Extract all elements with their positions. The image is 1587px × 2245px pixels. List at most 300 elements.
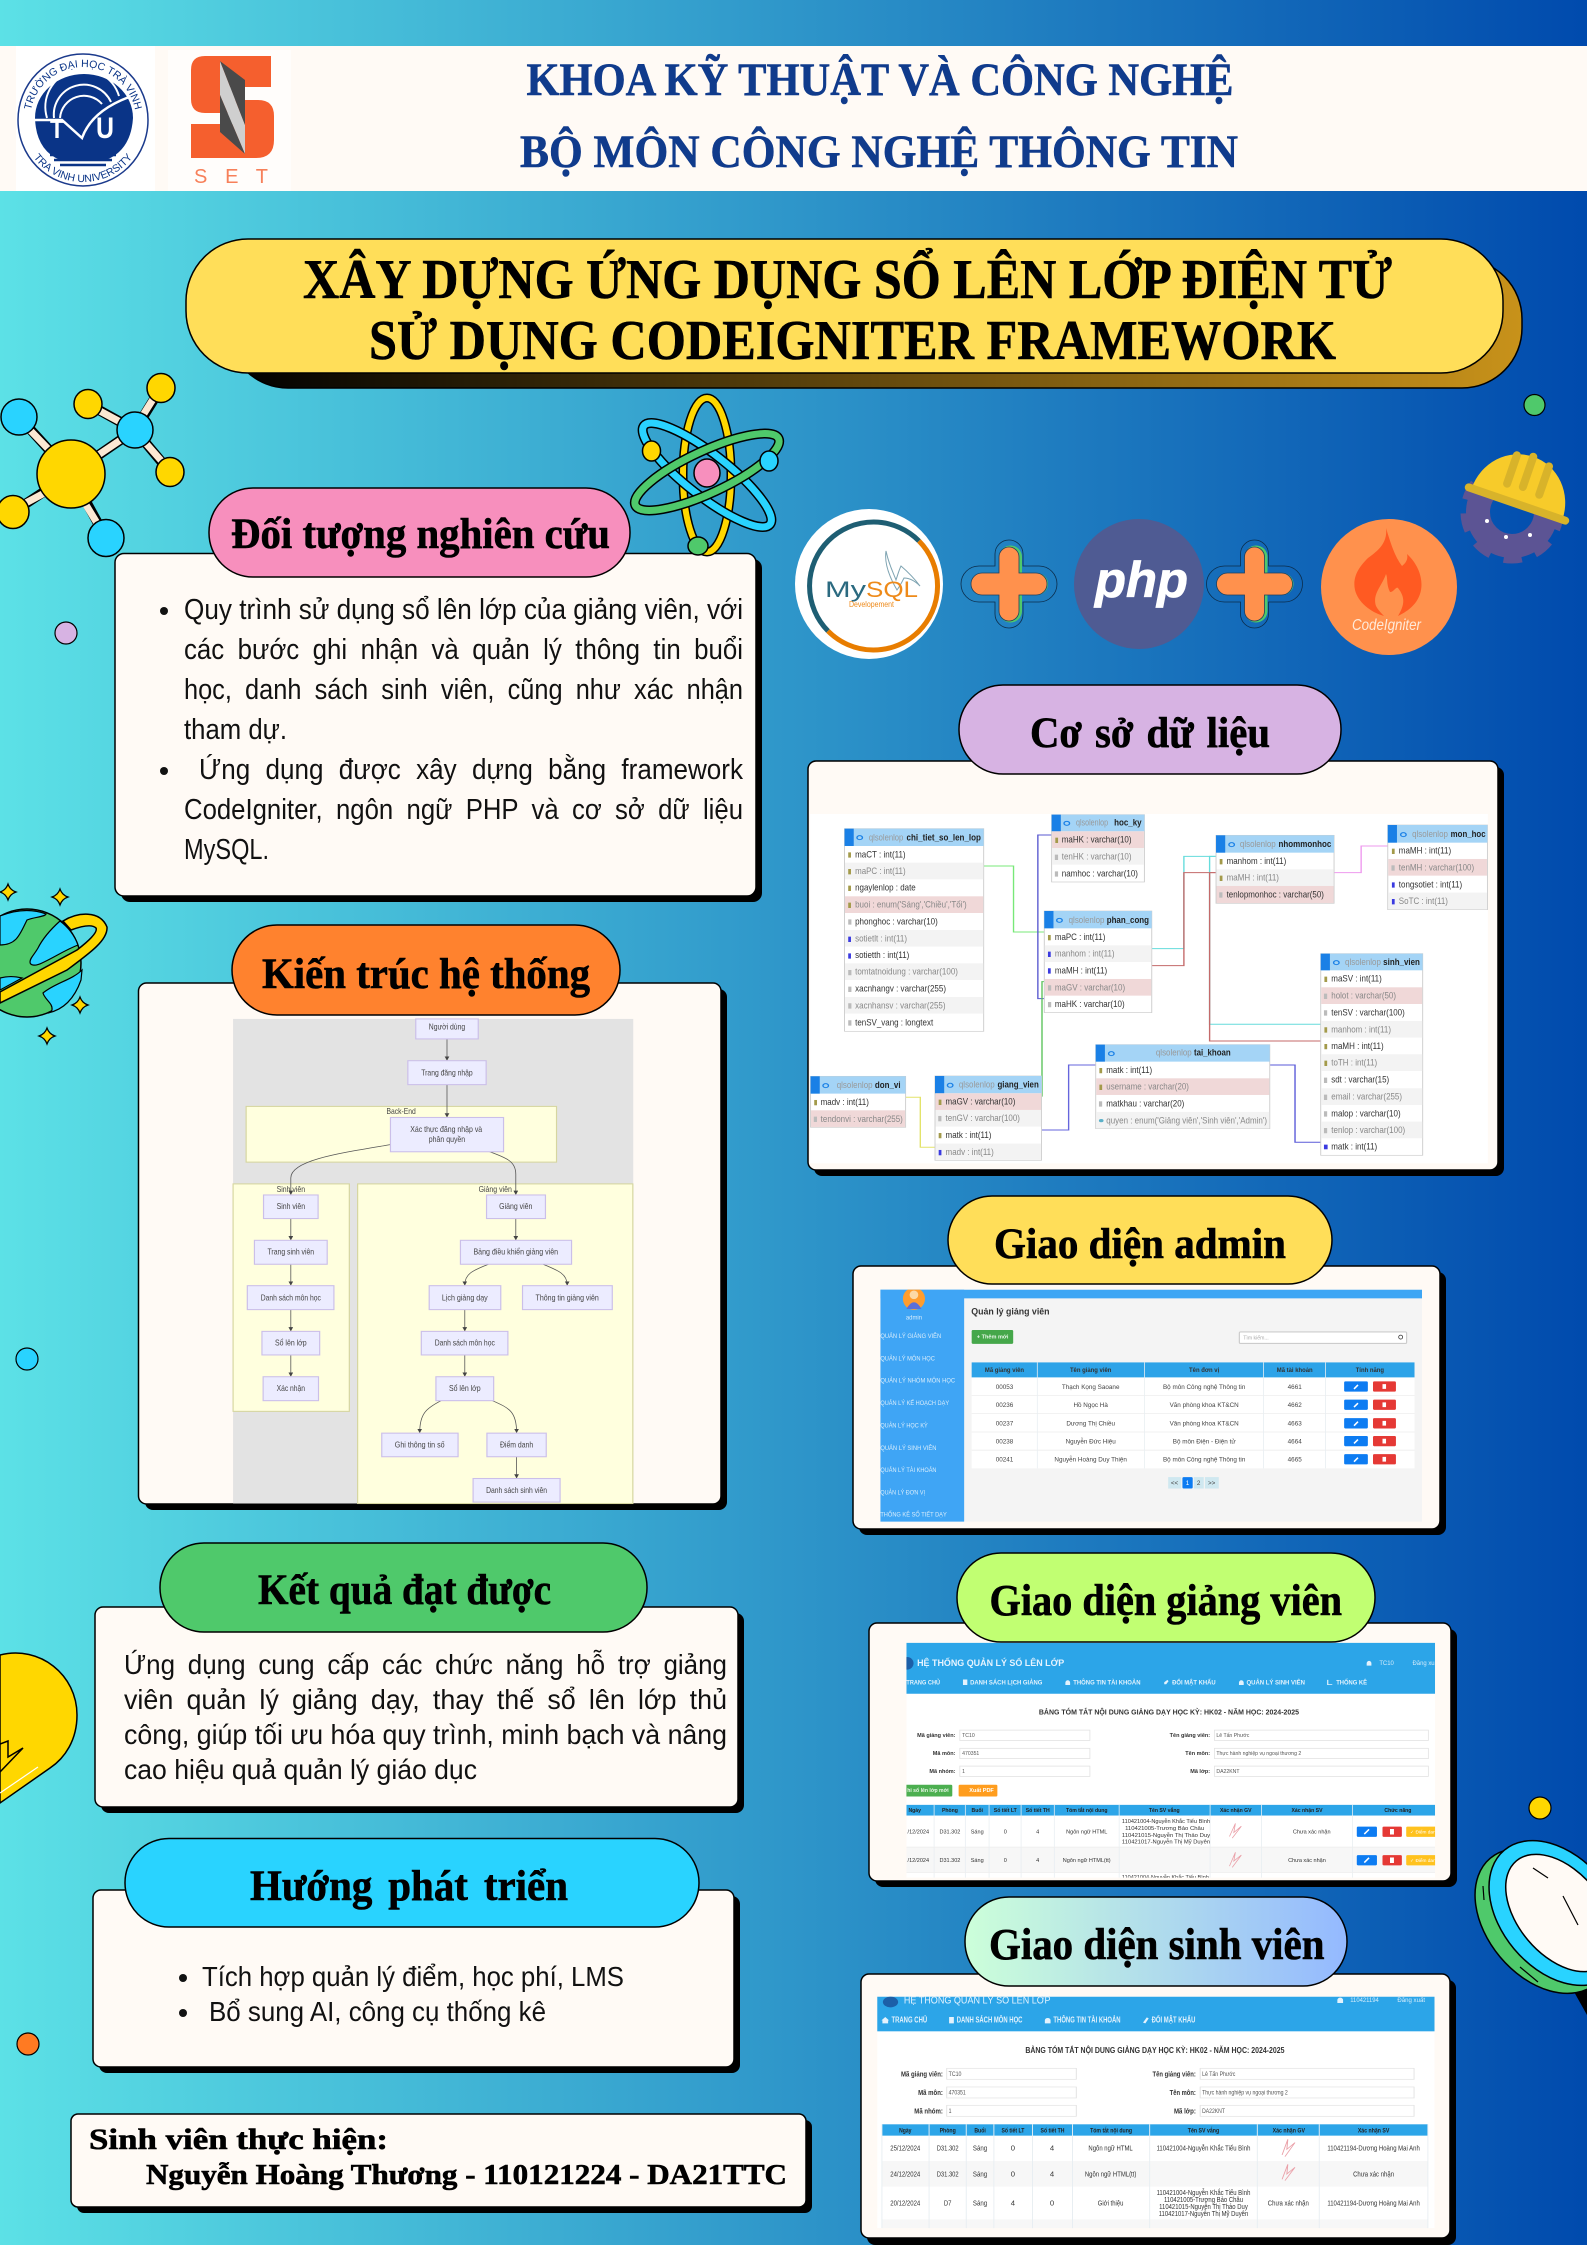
table: chi_tiet_so_len_lop: ngaylenlop : date <box>855 883 916 893</box>
admin screenshot: 4663 <box>1288 1420 1302 1427</box>
decorative dot: purple <box>55 622 77 644</box>
lecturer screenshot: Chưa xác nhận <box>1288 1858 1326 1864</box>
student screenshot: Tên giảng viên: <box>1153 2070 1196 2078</box>
icon: MySQL <box>795 509 943 659</box>
logo: Tra Vinh University: U <box>96 112 114 145</box>
heading: co so du lieu: Cơ sở dữ liệu <box>1030 710 1270 757</box>
student screenshot: TRANG CHỦ <box>891 2015 927 2025</box>
architecture diagram: Giảng viên <box>479 1185 512 1194</box>
table: sinh_vien: email : varchar(255) <box>1331 1092 1402 1102</box>
table: nhommonhoc: manhom : int(11) <box>1227 857 1286 866</box>
table: mon_hoc: mon_hoc <box>1451 830 1486 839</box>
logo: Tra Vinh University <box>16 46 155 191</box>
text block: results: công, giúp tối ưu hóa quy trình, minh bạch và nâng <box>124 1719 727 1750</box>
table: nhommonhoc: qlsolenlop <box>1240 840 1276 849</box>
text block: research objects: MySQL. <box>184 834 269 866</box>
student screenshot: 0 <box>1050 2199 1054 2207</box>
heading: giao dien giang vien: Giao diện giảng viên <box>990 1576 1342 1625</box>
student screenshot: 4 <box>1011 2199 1015 2207</box>
architecture diagram: Sổ lên lớp <box>275 1338 307 1348</box>
lecturer screenshot: Xác nhận SV <box>1291 1808 1323 1814</box>
header title <box>520 54 1238 178</box>
table: giang_vien: giang_vien <box>997 1080 1039 1090</box>
icon: PHP <box>1074 519 1204 649</box>
table: hoc_ky: namhoc : varchar(10) <box>1062 869 1138 879</box>
lecturer screenshot: ĐỔI MẬT KHẨU <box>1172 1680 1216 1687</box>
student screenshot: 0 <box>1011 2144 1015 2152</box>
heading: kien truc he thong <box>232 925 620 1015</box>
admin screenshot: 00236 <box>996 1402 1014 1409</box>
table: mon_hoc: SoTC : int(11) <box>1399 897 1448 906</box>
student screenshot: 1 <box>949 2107 952 2115</box>
lecturer screenshot: /12/2024 <box>908 1858 929 1864</box>
logo: Tra Vinh University: TRƯỜNG ĐẠI HỌC TRÀ VINH <box>24 60 142 110</box>
student screenshot: 110421194-Dương Hoàng Mai Anh <box>1327 2199 1420 2207</box>
admin screenshot: 00053 <box>996 1384 1014 1391</box>
main title banner: XÂY DỰNG ỨNG DỤNG SỔ LÊN LỚP ĐIỆN TỬ <box>303 247 1392 311</box>
admin screenshot: Văn phòng khoa KT&CN <box>1170 1402 1239 1409</box>
table: chi_tiet_so_len_lop: maPC : int(11) <box>855 867 906 876</box>
icon: light bulb <box>0 1653 77 1803</box>
student screenshot: Tên môn: <box>1170 2088 1196 2097</box>
admin screenshot: THỐNG KÊ SỐ TIẾT DẠY <box>880 1509 947 1519</box>
admin screenshot: 00238 <box>996 1438 1014 1445</box>
heading: ket qua dat duoc: Kết quả đạt được <box>258 1567 551 1614</box>
lecturer screenshot: ✓ Điểm danh <box>1410 1828 1439 1835</box>
decorative dot: orange <box>17 2033 39 2055</box>
student screenshot: Đăng xuất <box>1397 1996 1425 2004</box>
icon: MySQL: Developement <box>849 600 895 609</box>
logo: SET: S E T <box>194 166 268 188</box>
admin screenshot: Bộ môn Công nghệ Thông tin <box>1163 1384 1246 1391</box>
admin screenshot: Mã tài khoản <box>1277 1368 1313 1374</box>
lecturer screenshot: Tóm tắt nội dung <box>1066 1807 1108 1814</box>
text block: research objects: Ứng dụng được xây dựng bằng framework <box>199 753 743 786</box>
logo: SET <box>168 50 291 191</box>
student screenshot: 110421017-Nguyễn Thị Mỹ Duyên <box>1159 2209 1248 2218</box>
table: nhommonhoc: maMH : int(11) <box>1227 873 1279 883</box>
table: hoc_ky: maHK : varchar(10) <box>1062 835 1132 845</box>
student screenshot: 4 <box>1050 2144 1054 2152</box>
table: tai_khoan: quyen : enum('Giảng viên','Sinh viên','Admin') <box>1106 1116 1267 1126</box>
admin screenshot <box>880 1288 1422 1522</box>
architecture diagram: Danh sách sinh viên <box>486 1486 547 1495</box>
student screenshot: Mã môn: <box>918 2088 943 2097</box>
icon: helmet and gear <box>1464 439 1585 559</box>
admin screenshot: QUẢN LÝ ĐƠN VỊ <box>880 1487 925 1496</box>
student screenshot: Xác nhận SV <box>1358 2127 1390 2134</box>
table: phan_cong: phan_cong <box>1107 916 1149 925</box>
architecture diagram: Xác nhận <box>277 1384 305 1393</box>
text block: research objects <box>160 594 743 866</box>
student screenshot: 25/12/2024 <box>890 2144 920 2152</box>
student screenshot: D31.302 <box>937 2144 959 2152</box>
admin screenshot: QUẢN LÝ TÀI KHOẢN <box>880 1465 937 1474</box>
student screenshot <box>877 1994 1435 2228</box>
icon: atom <box>627 398 787 555</box>
table: phan_cong: maMH : int(11) <box>1055 966 1107 976</box>
database diagram <box>810 814 1488 1163</box>
text block: research objects: Quy trình sử dụng sổ lên lớp của giảng viên, với <box>184 594 743 626</box>
lecturer screenshot: Ngôn ngữ HTML <box>1066 1830 1107 1836</box>
student screenshot: HỆ THỐNG QUẢN LÝ SỔ LÊN LỚP <box>904 1994 1051 2006</box>
admin screenshot: Tìm kiếm... <box>1243 1335 1269 1341</box>
student screenshot: Buổi <box>974 2126 986 2134</box>
text block: research objects: các bước ghi nhận và quản lý thông tin buổi <box>184 634 743 666</box>
icon: plus <box>1206 540 1302 628</box>
admin screenshot: Quản lý giảng viên <box>971 1307 1050 1317</box>
table: don_vi: tendonvi : varchar(255) <box>821 1114 903 1124</box>
architecture diagram: Bảng điều khiển giảng viên <box>473 1247 558 1257</box>
admin screenshot: QUẢN LÝ MÔN HỌC <box>880 1353 935 1362</box>
admin screenshot: >> <box>1208 1480 1216 1487</box>
lecturer screenshot: TRANG CHỦ <box>906 1680 940 1687</box>
text block: future work: Tích hợp quản lý điểm, học phí, LMS <box>202 1961 624 1992</box>
student screenshot: 0 <box>1011 2170 1015 2178</box>
student screenshot: 110421194-Dương Hoàng Mai Anh <box>1327 2144 1420 2152</box>
architecture diagram: Back-End <box>386 1107 416 1116</box>
lecturer screenshot: Mã môn: <box>933 1751 956 1757</box>
main title banner: SỬ DỤNG CODEIGNITER FRAMEWORK <box>369 310 1336 372</box>
table: phan_cong: qlsolenlop <box>1069 916 1104 925</box>
lecturer screenshot: TC10 <box>1379 1661 1395 1667</box>
icon: MySQL: SQL <box>866 577 918 602</box>
admin screenshot: 00241 <box>996 1457 1014 1464</box>
student screenshot: Ngôn ngữ HTML(tt) <box>1085 2170 1136 2178</box>
student screenshot: 110421004-Nguyễn Khắc Tiểu Bình <box>1157 2144 1250 2152</box>
table: phan_cong <box>1044 911 1152 1013</box>
student screenshot: Xác nhận GV <box>1273 2127 1305 2134</box>
table: phan_cong: manhom : int(11) <box>1055 949 1115 959</box>
panel: student info: Nguyễn Hoàng Thương - 110121224 - DA21TTC <box>146 2159 787 2191</box>
architecture diagram: Sinh viên <box>277 1203 305 1211</box>
lecturer screenshot: Sáng <box>971 1830 984 1836</box>
lecturer screenshot: Buổi <box>972 1807 983 1814</box>
lecturer screenshot: 110421015-Nguyễn Thị Thảo Duy <box>1122 1832 1210 1839</box>
student screenshot: 110421005-Trương Bảo Châu <box>1164 2195 1243 2204</box>
table: chi_tiet_so_len_lop: xacnhansv : varchar(255) <box>855 1001 946 1011</box>
architecture diagram: Trang đăng nhập <box>421 1069 473 1077</box>
panel: kien truc he thong <box>138 925 727 1510</box>
table: mon_hoc: maMH : int(11) <box>1399 846 1451 856</box>
architecture diagram: phân quyền <box>429 1135 466 1144</box>
student screenshot: Số tiết TH <box>1041 2127 1064 2134</box>
architecture diagram: Trang sinh viên <box>267 1248 314 1257</box>
admin screenshot: Dương Thị Chiều <box>1066 1418 1115 1427</box>
architecture diagram: Người dùng <box>429 1023 466 1032</box>
lecturer screenshot: 4 <box>1036 1858 1039 1864</box>
lecturer screenshot: Sáng <box>971 1858 984 1864</box>
lecturer screenshot: Chưa xác nhận <box>1293 1830 1331 1836</box>
lecturer screenshot: Xác nhận GV <box>1220 1808 1252 1814</box>
student screenshot: 4 <box>1050 2170 1054 2178</box>
heading: giao dien sinh vien <box>965 1897 1347 1986</box>
lecturer screenshot: /12/2024 <box>908 1830 929 1836</box>
table: sinh_vien: matk : int(11) <box>1331 1142 1377 1152</box>
student screenshot: ĐỔI MẬT KHẨU <box>1152 2015 1195 2025</box>
lecturer screenshot: Thực hành nghiệp vụ ngoại thương 2 <box>1216 1751 1301 1757</box>
panel: student info: Sinh viên thực hiện: <box>89 2123 388 2156</box>
admin screenshot: Văn phòng khoa KT&CN <box>1170 1420 1239 1427</box>
table: chi_tiet_so_len_lop: tenSV_vang : longtext <box>855 1018 933 1028</box>
panel: giao dien admin <box>853 1196 1446 1535</box>
lecturer screenshot: BẢNG TÓM TẮT NỘI DUNG GIẢNG DẠY HỌC KỲ: HK02 - NĂM HỌC: 2024-2025 <box>1039 1708 1299 1717</box>
student screenshot: Lê Tấn Phước <box>1202 2070 1235 2078</box>
lecturer screenshot: Mã lớp: <box>1190 1769 1210 1775</box>
table: hoc_ky: hoc_ky <box>1114 818 1142 828</box>
table: giang_vien: matk : int(11) <box>946 1130 991 1140</box>
table: sinh_vien: qlsolenlop <box>1345 958 1381 967</box>
heading: giao dien admin: Giao diện admin <box>994 1221 1286 1268</box>
admin screenshot: QUẢN LÝ KẾ HOẠCH DẠY <box>880 1397 950 1407</box>
table: giang_vien <box>935 1076 1042 1160</box>
admin screenshot: 00237 <box>996 1420 1014 1427</box>
heading: huong phat trien: Hướng phát triển <box>250 1863 568 1910</box>
table: nhommonhoc <box>1216 835 1334 903</box>
header band <box>0 46 1587 191</box>
lecturer screenshot: DANH SÁCH LỊCH GIẢNG <box>970 1680 1043 1687</box>
lecturer screenshot: 470351 <box>962 1751 979 1757</box>
student screenshot: Sáng <box>973 2144 987 2152</box>
logo: Tra Vinh University: T <box>50 114 64 144</box>
student screenshot: DA22KNT <box>1202 2107 1225 2115</box>
table: sinh_vien: maSV : int(11) <box>1331 974 1382 984</box>
panel: giao dien giang vien <box>869 1553 1457 1887</box>
table: giang_vien: maGV : varchar(10) <box>946 1097 1015 1107</box>
architecture diagram: Sinh viên <box>277 1185 305 1194</box>
lecturer screenshot: Tên SV vắng <box>1149 1807 1180 1814</box>
table: sinh_vien <box>1321 954 1423 1155</box>
text block: results: viên quản lý giảng dạy, thay thế sổ lên lớp thủ <box>124 1684 727 1715</box>
student screenshot: DANH SÁCH MÔN HỌC <box>957 2015 1022 2025</box>
lecturer screenshot: HỆ THỐNG QUẢN LÝ SỔ LÊN LỚP <box>917 1657 1064 1668</box>
table: tai_khoan: qlsolenlop <box>1156 1048 1192 1058</box>
table: hoc_ky <box>1052 815 1144 882</box>
lecturer screenshot <box>901 1643 1440 1881</box>
table: sinh_vien: tenSV : varchar(100) <box>1331 1008 1405 1018</box>
table: tai_khoan: matk : int(11) <box>1106 1065 1152 1075</box>
lecturer screenshot: 110421004-Nguyễn Khắc Tiểu Bình <box>1122 1818 1210 1825</box>
student screenshot: Giới thiệu <box>1098 2199 1123 2207</box>
lecturer screenshot: TC10 <box>962 1733 975 1739</box>
student screenshot: THÔNG TIN TÀI KHOẢN <box>1053 2015 1121 2025</box>
admin screenshot: Nguyễn Hoàng Duy Thiện <box>1054 1455 1127 1464</box>
heading: giao dien sinh vien: Giao diện sinh viên <box>989 1920 1324 1969</box>
lecturer screenshot: Mã nhóm: <box>929 1769 956 1775</box>
table: chi_tiet_so_len_lop: chi_tiet_so_len_lop <box>907 833 981 843</box>
table: mon_hoc: qlsolenlop <box>1412 830 1448 839</box>
student screenshot: Chưa xác nhận <box>1268 2199 1309 2207</box>
icon: molecule <box>0 374 184 556</box>
lecturer screenshot: Đăng xuất <box>1413 1661 1440 1667</box>
admin screenshot: + Thêm mới <box>977 1335 1009 1341</box>
decorative dot: blue <box>16 1348 38 1370</box>
admin screenshot: Bộ môn Điện - Điện tử <box>1173 1437 1236 1445</box>
lecturer screenshot: Số tiết LT <box>994 1807 1018 1814</box>
table: chi_tiet_so_len_lop: phonghoc : varchar(10) <box>855 917 938 927</box>
lecturer screenshot: Ngôn ngữ HTML(tt) <box>1063 1858 1111 1864</box>
student screenshot: Mã giảng viên: <box>901 2070 943 2078</box>
admin screenshot: QUẢN LÝ SINH VIÊN <box>880 1443 937 1452</box>
table: sinh_vien: maMH : int(11) <box>1331 1041 1384 1051</box>
admin screenshot: admin <box>906 1315 922 1321</box>
table: tai_khoan: matkhau : varchar(20) <box>1106 1099 1184 1109</box>
table: chi_tiet_so_len_lop: buoi : enum('Sáng','Chiều','Tối') <box>855 900 967 910</box>
table: tai_khoan: tai_khoan <box>1194 1048 1231 1058</box>
header title: KHOA KỸ THUẬT VÀ CÔNG NGHỆ <box>526 54 1234 106</box>
text block: future work: Bổ sung AI, công cụ thống kê <box>209 1996 546 2027</box>
student screenshot: 110421004-Nguyễn Khắc Tiểu Bình <box>1157 2188 1250 2197</box>
admin screenshot: Nguyễn Đức Hiệu <box>1066 1436 1116 1445</box>
table: don_vi: qlsolenlop <box>837 1080 873 1090</box>
icon: plus <box>961 540 1057 628</box>
student screenshot: 24/12/2024 <box>890 2170 920 2178</box>
lecturer screenshot: Mã giảng viên: <box>917 1733 956 1739</box>
lecturer screenshot: 0 <box>1004 1858 1007 1864</box>
architecture diagram: Xác thực đăng nhập và <box>410 1125 483 1134</box>
table: giang_vien: madv : int(11) <box>946 1147 994 1157</box>
admin screenshot: Tên giảng viên <box>1070 1368 1112 1374</box>
table: tai_khoan <box>1096 1045 1270 1129</box>
table: sinh_vien: sdt : varchar(15) <box>1331 1075 1389 1085</box>
admin screenshot: 4661 <box>1288 1384 1302 1391</box>
main title banner <box>186 239 1522 388</box>
student screenshot: Tên SV vắng <box>1188 2125 1219 2134</box>
table: phan_cong: maPC : int(11) <box>1055 933 1105 942</box>
lecturer screenshot: ✓ Điểm danh <box>1410 1857 1439 1864</box>
student screenshot: 110421015-Nguyễn Thị Thảo Duy <box>1159 2202 1248 2211</box>
admin screenshot: 4662 <box>1288 1402 1302 1409</box>
icon: MySQL: My <box>825 577 866 602</box>
lecturer screenshot: 4 <box>1036 1830 1039 1836</box>
lecturer screenshot: Chức năng <box>1384 1808 1411 1814</box>
admin screenshot: QUẢN LÝ NHÓM MÔN HỌC <box>880 1376 955 1385</box>
admin screenshot: 1 <box>1186 1480 1190 1487</box>
heading: doi tuong nghien cuu <box>209 488 630 577</box>
panel: doi tuong nghien cuu <box>115 488 762 902</box>
panel: giao dien sinh vien <box>861 1897 1456 2245</box>
student screenshot: 110421194 <box>1350 1996 1379 2004</box>
heading: giao dien giang vien <box>957 1553 1375 1642</box>
heading: ket qua dat duoc <box>160 1543 647 1632</box>
lecturer screenshot: THỐNG KÊ <box>1336 1679 1367 1687</box>
table: sinh_vien: malop : varchar(10) <box>1331 1109 1401 1119</box>
table: phan_cong: maGV : varchar(10) <box>1055 983 1125 993</box>
icon: magnifier <box>1447 1814 1587 2020</box>
lecturer screenshot: Tên giảng viên: <box>1170 1733 1210 1739</box>
architecture diagram: Ghi thông tin số <box>395 1441 445 1449</box>
table: nhommonhoc: tenlopmonhoc : varchar(50) <box>1227 890 1324 900</box>
student screenshot: D31.302 <box>937 2170 959 2178</box>
heading: co so du lieu <box>959 685 1341 774</box>
text block: research objects: học, danh sách sinh viên, cũng như xác nhận <box>184 674 743 706</box>
table: chi_tiet_so_len_lop: maCT : int(11) <box>855 850 906 860</box>
table: nhommonhoc: nhommonhoc <box>1278 840 1331 849</box>
admin screenshot: Thạch Kọng Saoane <box>1062 1384 1120 1391</box>
architecture diagram: Lịch giảng dạy <box>442 1294 488 1302</box>
lecturer screenshot: Số tiết TH <box>1026 1807 1050 1814</box>
table: mon_hoc <box>1388 825 1487 910</box>
student screenshot: Số tiết LT <box>1001 2127 1024 2134</box>
table: mon_hoc: tenMH : varchar(100) <box>1399 863 1474 873</box>
architecture diagram: Giảng viên <box>499 1203 533 1211</box>
admin screenshot: << <box>1171 1480 1179 1487</box>
admin screenshot: Bộ môn Công nghệ Thông tin <box>1163 1457 1246 1464</box>
lecturer screenshot: 0 <box>1004 1830 1007 1836</box>
logo row <box>795 509 1457 659</box>
header title: BỘ MÔN CÔNG NGHỆ THÔNG TIN <box>520 126 1238 178</box>
table: sinh_vien: sinh_vien <box>1383 958 1420 967</box>
heading: huong phat trien <box>125 1838 699 1927</box>
admin screenshot: 4664 <box>1288 1438 1302 1445</box>
text block: results: Ứng dụng cung cấp các chức năng hỗ trợ giảng <box>124 1649 727 1680</box>
table: chi_tiet_so_len_lop: sotietth : int(11) <box>855 951 909 960</box>
icon: PHP: php <box>1093 552 1188 608</box>
admin screenshot: QUẢN LÝ HỌC KỲ <box>880 1420 928 1429</box>
panel: student info <box>71 2114 812 2213</box>
table: chi_tiet_so_len_lop: sotietlt : int(11) <box>855 934 907 944</box>
table: sinh_vien: holot : varchar(50) <box>1331 991 1396 1001</box>
lecturer screenshot: 110421005-Trương Bảo Châu <box>1125 1826 1204 1832</box>
table: phan_cong: maHK : varchar(10) <box>1055 999 1125 1009</box>
student screenshot: Tóm tắt nội dung <box>1090 2125 1132 2134</box>
admin screenshot: Hồ Ngọc Hà <box>1073 1400 1108 1409</box>
student screenshot: Thực hành nghiệp vụ ngoại thương 2 <box>1202 2089 1288 2096</box>
panel: co so du lieu <box>808 685 1504 1176</box>
lecturer screenshot: THÔNG TIN TÀI KHOẢN <box>1073 1679 1141 1687</box>
student screenshot: Mã nhóm: <box>914 2107 943 2115</box>
student screenshot: Ngày <box>899 2127 912 2134</box>
admin screenshot: Tính năng <box>1356 1368 1384 1374</box>
table: chi_tiet_so_len_lop <box>845 829 984 1031</box>
admin screenshot: Mã giảng viên <box>985 1368 1024 1374</box>
icon: CodeIgniter: CodeIgniter <box>1352 617 1422 634</box>
text block: research objects: tham dự. <box>184 714 287 746</box>
panel: huong phat trien <box>93 1838 740 2073</box>
text block: research objects: CodeIgniter, ngôn ngữ PHP và cơ sở dữ liệu <box>184 794 743 826</box>
icon: planet <box>0 884 107 1044</box>
table: hoc_ky: tenHK : varchar(10) <box>1062 852 1132 862</box>
table: chi_tiet_so_len_lop: tomtatnoidung : varchar(100) <box>855 967 958 977</box>
lecturer screenshot: 110421004-Nguyễn Khắc Tiểu Bình <box>1122 1874 1209 1881</box>
student screenshot: Chưa xác nhận <box>1353 2170 1394 2178</box>
icon: CodeIgniter <box>1321 519 1457 655</box>
student screenshot: Sáng <box>973 2199 987 2207</box>
lecturer screenshot: Tên môn: <box>1185 1751 1210 1757</box>
admin screenshot: QUẢN LÝ GIẢNG VIÊN <box>880 1331 942 1340</box>
admin screenshot: 2 <box>1197 1480 1201 1487</box>
table: chi_tiet_so_len_lop: qlsolenlop <box>869 833 903 843</box>
lecturer screenshot: Phòng <box>942 1808 958 1814</box>
admin screenshot: Tên đơn vị <box>1189 1368 1220 1374</box>
student screenshot: 470351 <box>949 2089 966 2096</box>
table: giang_vien: qlsolenlop <box>959 1080 995 1090</box>
table: don_vi: don_vi <box>875 1080 901 1090</box>
lecturer screenshot: D31.302 <box>939 1858 960 1864</box>
lecturer screenshot: hi sổ lên lớp mới <box>907 1787 949 1794</box>
decorative dot: green <box>1524 394 1545 416</box>
logo: Tra Vinh University: TRA VINH UNIVERSITY <box>35 152 130 182</box>
panel: ket qua dat duoc <box>95 1543 744 1813</box>
table: tai_khoan: username : varchar(20) <box>1106 1082 1189 1092</box>
text block: results <box>124 1649 727 1785</box>
lecturer screenshot: Ngày <box>908 1808 921 1814</box>
student screenshot: TC10 <box>949 2070 962 2078</box>
student screenshot: 20/12/2024 <box>890 2199 920 2207</box>
architecture diagram: Danh sách môn học <box>261 1294 321 1302</box>
architecture diagram: Điểm danh <box>500 1440 534 1449</box>
lecturer screenshot: DA22KNT <box>1216 1769 1240 1775</box>
